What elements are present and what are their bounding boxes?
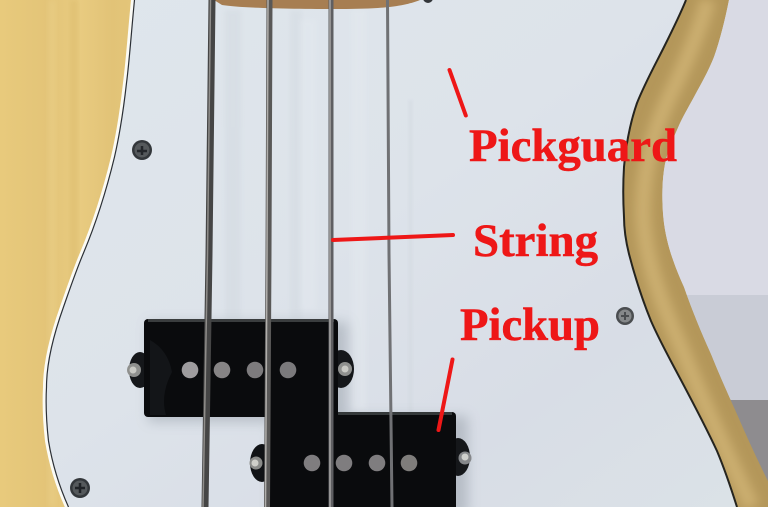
pickup: upper half: [144, 319, 338, 417]
pickguard left edge binding: [45, 0, 133, 507]
callout: Pickguard: [450, 70, 677, 172]
guitar body: gold edge band: [624, 0, 768, 507]
neck: maple wood end: [214, 0, 420, 9]
neck screw: [423, 0, 433, 3]
callout: Pickguard: Pickguard: [469, 121, 677, 172]
pickguard right edge binding: [623, 0, 737, 507]
pickup: mounting ears and screws: [127, 350, 472, 482]
screw: right: [616, 307, 634, 325]
background wall: [600, 0, 768, 507]
guitar body: yellow finish: [0, 0, 160, 507]
pickup: lower half: [268, 412, 456, 507]
callout: String: [333, 216, 598, 267]
callout: String: String: [473, 216, 598, 267]
screw: upper left: [132, 140, 152, 160]
pickup shadow: [148, 322, 468, 507]
strings: [203, 0, 392, 507]
callout: Pickup: Pickup: [460, 300, 600, 351]
screw: lower left: [70, 478, 90, 498]
callout: Pickup: [438, 300, 600, 430]
